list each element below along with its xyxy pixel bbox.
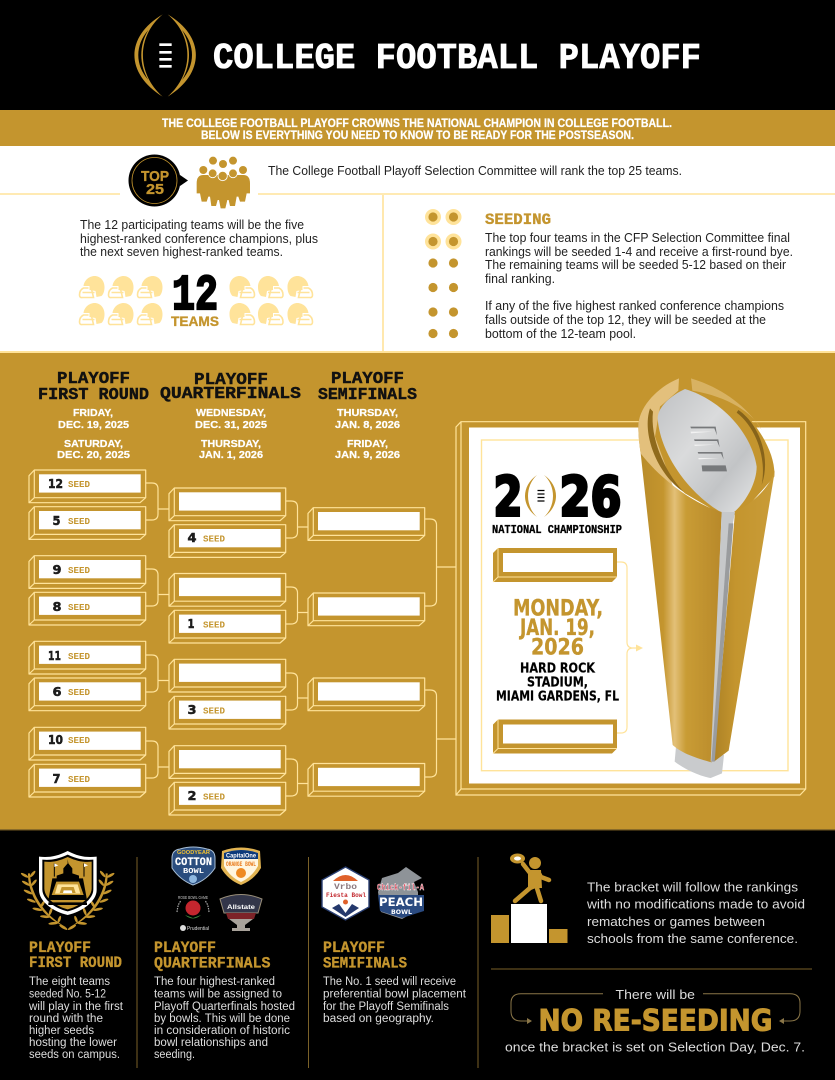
- column heading: first round: PLAYOFF: [57, 370, 130, 389]
- logo: peach bowl: BOWL: [391, 909, 412, 916]
- championship date: [496, 596, 619, 704]
- seeding text: SEEDING: [485, 211, 551, 229]
- column heading: first round: FIRST ROUND: [38, 386, 149, 405]
- icon: top 25 bubble: TOP: [141, 168, 169, 185]
- logo: sugar bowl: Allstate: [227, 904, 255, 911]
- first round seed boxes: 11: [48, 649, 61, 663]
- callout: no re-seeding: There will be: [616, 988, 695, 1002]
- logo: fiesta bowl: [322, 867, 369, 920]
- trophy laces: [690, 427, 727, 471]
- trophy: [638, 378, 775, 778]
- championship date: STADIUM,: [527, 676, 588, 690]
- bracket rule text: The bracket will follow the rankings: [587, 880, 798, 894]
- trophy right panel: [714, 470, 775, 762]
- column heading: semifinals: JAN. 8, 2026: [335, 419, 400, 431]
- panel: national championship frame: [456, 378, 806, 795]
- quarterfinals text: [154, 939, 295, 1061]
- first round seed boxes: SEED: [68, 479, 90, 490]
- quarterfinal seed boxes: SEED: [203, 706, 225, 716]
- column heading: first round: [38, 370, 149, 461]
- bracket rule text: rematches or games between: [587, 915, 765, 929]
- column heading: quarterfinals: JAN. 1, 2026: [199, 449, 263, 461]
- column heading: semifinals: PLAYOFF: [331, 370, 404, 389]
- seeding text: The top four teams in the CFP Selection Committee final: [485, 231, 790, 245]
- semifinals text: preferential bowl placement: [323, 988, 467, 1000]
- logo: orange bowl: ORANGE BOWL: [226, 861, 256, 868]
- semifinals text: PLAYOFF: [323, 939, 385, 957]
- seeding text: [485, 211, 793, 341]
- quarterfinals text: Playoff Quarterfinals hosted: [154, 1001, 295, 1013]
- icon: stadium shield and laurels: [20, 851, 115, 931]
- callout: no re-seeding: NO RE-SEEDING: [538, 1004, 772, 1038]
- first round seed boxes: 7: [52, 772, 60, 786]
- logo: fiesta bowl: Vrbo: [334, 883, 357, 892]
- committee text: The College Football Playoff Selection Committee will rank the top 25 teams.: [268, 164, 682, 178]
- first round text: seeded No. 5-12: [29, 988, 106, 1000]
- icon: top 25 bubble: [128, 154, 188, 206]
- seeding text: final ranking.: [485, 272, 555, 286]
- logo: peach bowl: Chick-fil-A: [377, 882, 424, 893]
- first round text: The eight teams: [29, 976, 110, 988]
- column heading: semifinals: SEMIFINALS: [318, 386, 417, 405]
- logo: orange bowl: CapitalOne: [226, 852, 256, 860]
- 12 teams label: TEAMS: [171, 313, 219, 329]
- first round seed boxes: 12: [48, 477, 63, 491]
- first round seed boxes: SEED: [68, 602, 90, 613]
- quarterfinals text: bowl relationships and: [154, 1037, 268, 1049]
- column heading: semifinals: THURSDAY,: [337, 407, 398, 419]
- quarterfinal seed boxes: [169, 488, 286, 815]
- column heading: first round: SATURDAY,: [64, 438, 123, 450]
- participating teams text: [80, 218, 318, 259]
- first round seed boxes: 8: [52, 600, 62, 614]
- semifinals text: SEMIFINALS: [323, 954, 407, 972]
- quarterfinals text: The four highest-ranked: [154, 976, 275, 988]
- logo: orange bowl: [221, 848, 261, 885]
- icon: committee group: [197, 157, 250, 208]
- championship date: 2026: [531, 636, 584, 660]
- final connector and arrow: [617, 562, 643, 733]
- quarterfinal seed boxes: SEED: [203, 620, 225, 630]
- seeding text: bottom of the 12-team pool.: [485, 327, 636, 341]
- callout: no re-seeding: once the bracket is set on Selection Day, Dec. 7.: [505, 1040, 805, 1054]
- participating teams text: highest-ranked conference champions, plus: [80, 232, 318, 246]
- semifinals text: based on geography.: [323, 1013, 434, 1025]
- logo: fiesta bowl: Fiesta Bowl: [326, 892, 366, 899]
- quarterfinals text: PLAYOFF: [154, 939, 216, 957]
- column heading: first round: DEC. 19, 2025: [58, 419, 129, 431]
- logo: rose bowl: Prudential: [187, 926, 209, 932]
- participating teams text: the next seven highest-ranked teams.: [80, 245, 283, 259]
- participating teams text: The 12 participating teams will be the five: [80, 218, 304, 232]
- trophy silver football: [658, 389, 757, 513]
- first round seed boxes: SEED: [68, 735, 90, 746]
- trophy rim: [638, 378, 774, 517]
- championship date: JAN. 19,: [518, 616, 595, 641]
- icon: football logo: [134, 14, 196, 97]
- logo: rose bowl: ROSE BOWL GAME: [178, 895, 208, 900]
- first round seed boxes: SEED: [68, 516, 90, 527]
- column heading: semifinals: JAN. 9, 2026: [335, 449, 400, 461]
- column heading: quarterfinals: [160, 371, 301, 461]
- intro banner: THE COLLEGE FOOTBALL PLAYOFF CROWNS THE NATIONAL CHAMPION IN COLLEGE FOOTBALL.: [162, 118, 672, 130]
- quarterfinal seed boxes: SEED: [203, 792, 225, 802]
- championship date: HARD ROCK: [520, 662, 596, 676]
- icon: seeding dots: [425, 209, 462, 338]
- column heading: quarterfinals: QUARTERFINALS: [160, 385, 301, 404]
- first round text: PLAYOFF: [29, 939, 91, 957]
- championship date: MONDAY,: [513, 596, 603, 622]
- column heading: semifinals: [318, 370, 417, 461]
- first round text: round with the: [29, 1013, 103, 1025]
- first round seed boxes: 6: [52, 685, 62, 699]
- trophy silver strip: [711, 512, 735, 762]
- logo: cotton bowl: GOODYEAR: [177, 850, 210, 856]
- seeding text: falls outside of the top 12, they will be seeded at the: [485, 313, 766, 327]
- bracket connector lines: [146, 483, 493, 796]
- first round text: FIRST ROUND: [29, 954, 122, 972]
- semifinals text: for the Playoff Semifinals: [323, 1001, 449, 1013]
- first round text: [28, 939, 124, 1061]
- icon: semifinal bowl logos: [322, 867, 424, 920]
- header: [134, 14, 701, 97]
- seeding text: The remaining teams will be seeded 5-12 based on their: [485, 258, 786, 272]
- first round text: higher seeds: [29, 1025, 94, 1037]
- bracket rule text: schools from the same conference.: [587, 932, 798, 946]
- icon: quarterfinal bowl logos: [172, 847, 262, 932]
- trophy top: [638, 378, 774, 517]
- trophy base: [675, 747, 724, 778]
- 2026 national championship logo: 26: [560, 466, 622, 528]
- semifinals text: The No. 1 seed will receive: [323, 976, 456, 988]
- first round seed boxes: 10: [48, 733, 63, 747]
- icon: helmets right: [230, 276, 312, 325]
- first round text: will play in the first: [28, 1001, 124, 1013]
- first round seed boxes: SEED: [68, 651, 90, 662]
- panel: bracket: [0, 353, 835, 829]
- trophy left panel: [641, 453, 722, 762]
- quarterfinals text: QUARTERFINALS: [154, 954, 270, 972]
- panel: selection and seeding: [0, 146, 835, 353]
- intro banner: [0, 110, 835, 146]
- final team boxes: [493, 548, 617, 754]
- quarterfinal seed boxes: 1: [188, 617, 194, 631]
- column heading: quarterfinals: DEC. 31, 2025: [195, 419, 267, 431]
- first round seed boxes: SEED: [68, 565, 90, 576]
- first round seed boxes: SEED: [68, 774, 90, 785]
- first round text: hosting the lower: [29, 1037, 117, 1049]
- bracket rule text: [586, 880, 805, 946]
- first round text: seeds on campus.: [29, 1049, 120, 1061]
- logo: cotton bowl: [172, 847, 215, 885]
- quarterfinals text: by bowls. This will be done: [154, 1013, 290, 1025]
- quarterfinal seed boxes: SEED: [203, 534, 225, 544]
- quarterfinal seed boxes: 3: [188, 703, 196, 717]
- first round seed boxes: SEED: [68, 687, 90, 698]
- column heading: first round: FRIDAY,: [73, 407, 113, 419]
- intro banner: BELOW IS EVERYTHING YOU NEED TO KNOW TO BE READY FOR THE POSTSEASON.: [201, 130, 634, 142]
- column heading: semifinals: FRIDAY,: [347, 438, 388, 450]
- first round seed boxes: 9: [52, 563, 62, 577]
- column heading: quarterfinals: WEDNESDAY,: [196, 407, 266, 419]
- logo: cotton bowl: COTTON: [175, 857, 212, 869]
- logo: peach bowl: PEACH: [379, 895, 423, 909]
- semifinal boxes: [308, 508, 425, 796]
- icon: helmets left: [80, 276, 162, 325]
- quarterfinals text: teams will be assigned to: [154, 988, 282, 1000]
- semifinals text: [323, 939, 467, 1025]
- 2026 national championship logo: [492, 466, 622, 537]
- trophy inner grooves: [648, 408, 683, 492]
- quarterfinal seed boxes: 2: [188, 789, 196, 803]
- quarterfinal seed boxes: 4: [188, 531, 196, 545]
- 2026 national championship logo: 2: [494, 466, 522, 528]
- 2026 national championship logo: NATIONAL CHAMPIONSHIP: [492, 524, 622, 537]
- logo: rose bowl: [177, 895, 209, 932]
- seeding text: If any of the five highest ranked conference champions: [485, 299, 784, 313]
- column heading: quarterfinals: PLAYOFF: [194, 371, 268, 390]
- bracket rule text: with no modifications made to avoid: [586, 898, 805, 912]
- championship date: MIAMI GARDENS, FL: [496, 690, 619, 704]
- first round seed boxes: 5: [52, 514, 60, 528]
- 12 teams label: 12: [172, 268, 218, 325]
- panel: bottom information: [0, 829, 835, 1080]
- title: COLLEGE FOOTBALL PLAYOFF: [213, 38, 701, 79]
- column heading: first round: DEC. 20, 2025: [57, 449, 130, 461]
- column heading: quarterfinals: THURSDAY,: [201, 438, 261, 450]
- callout: no re-seeding: [505, 988, 805, 1054]
- quarterfinals text: in consideration of historic: [154, 1025, 290, 1037]
- icon: top 25 bubble: 25: [146, 181, 164, 198]
- logo: peach bowl: [377, 867, 424, 919]
- logo: cotton bowl: BOWL: [183, 868, 205, 876]
- first round seed boxes: [29, 470, 146, 797]
- icon: player on podium: [491, 854, 568, 943]
- quarterfinals text: seeding.: [154, 1049, 195, 1061]
- seeding text: rankings will be seeded 1-4 and receive a first-round bye.: [485, 245, 793, 259]
